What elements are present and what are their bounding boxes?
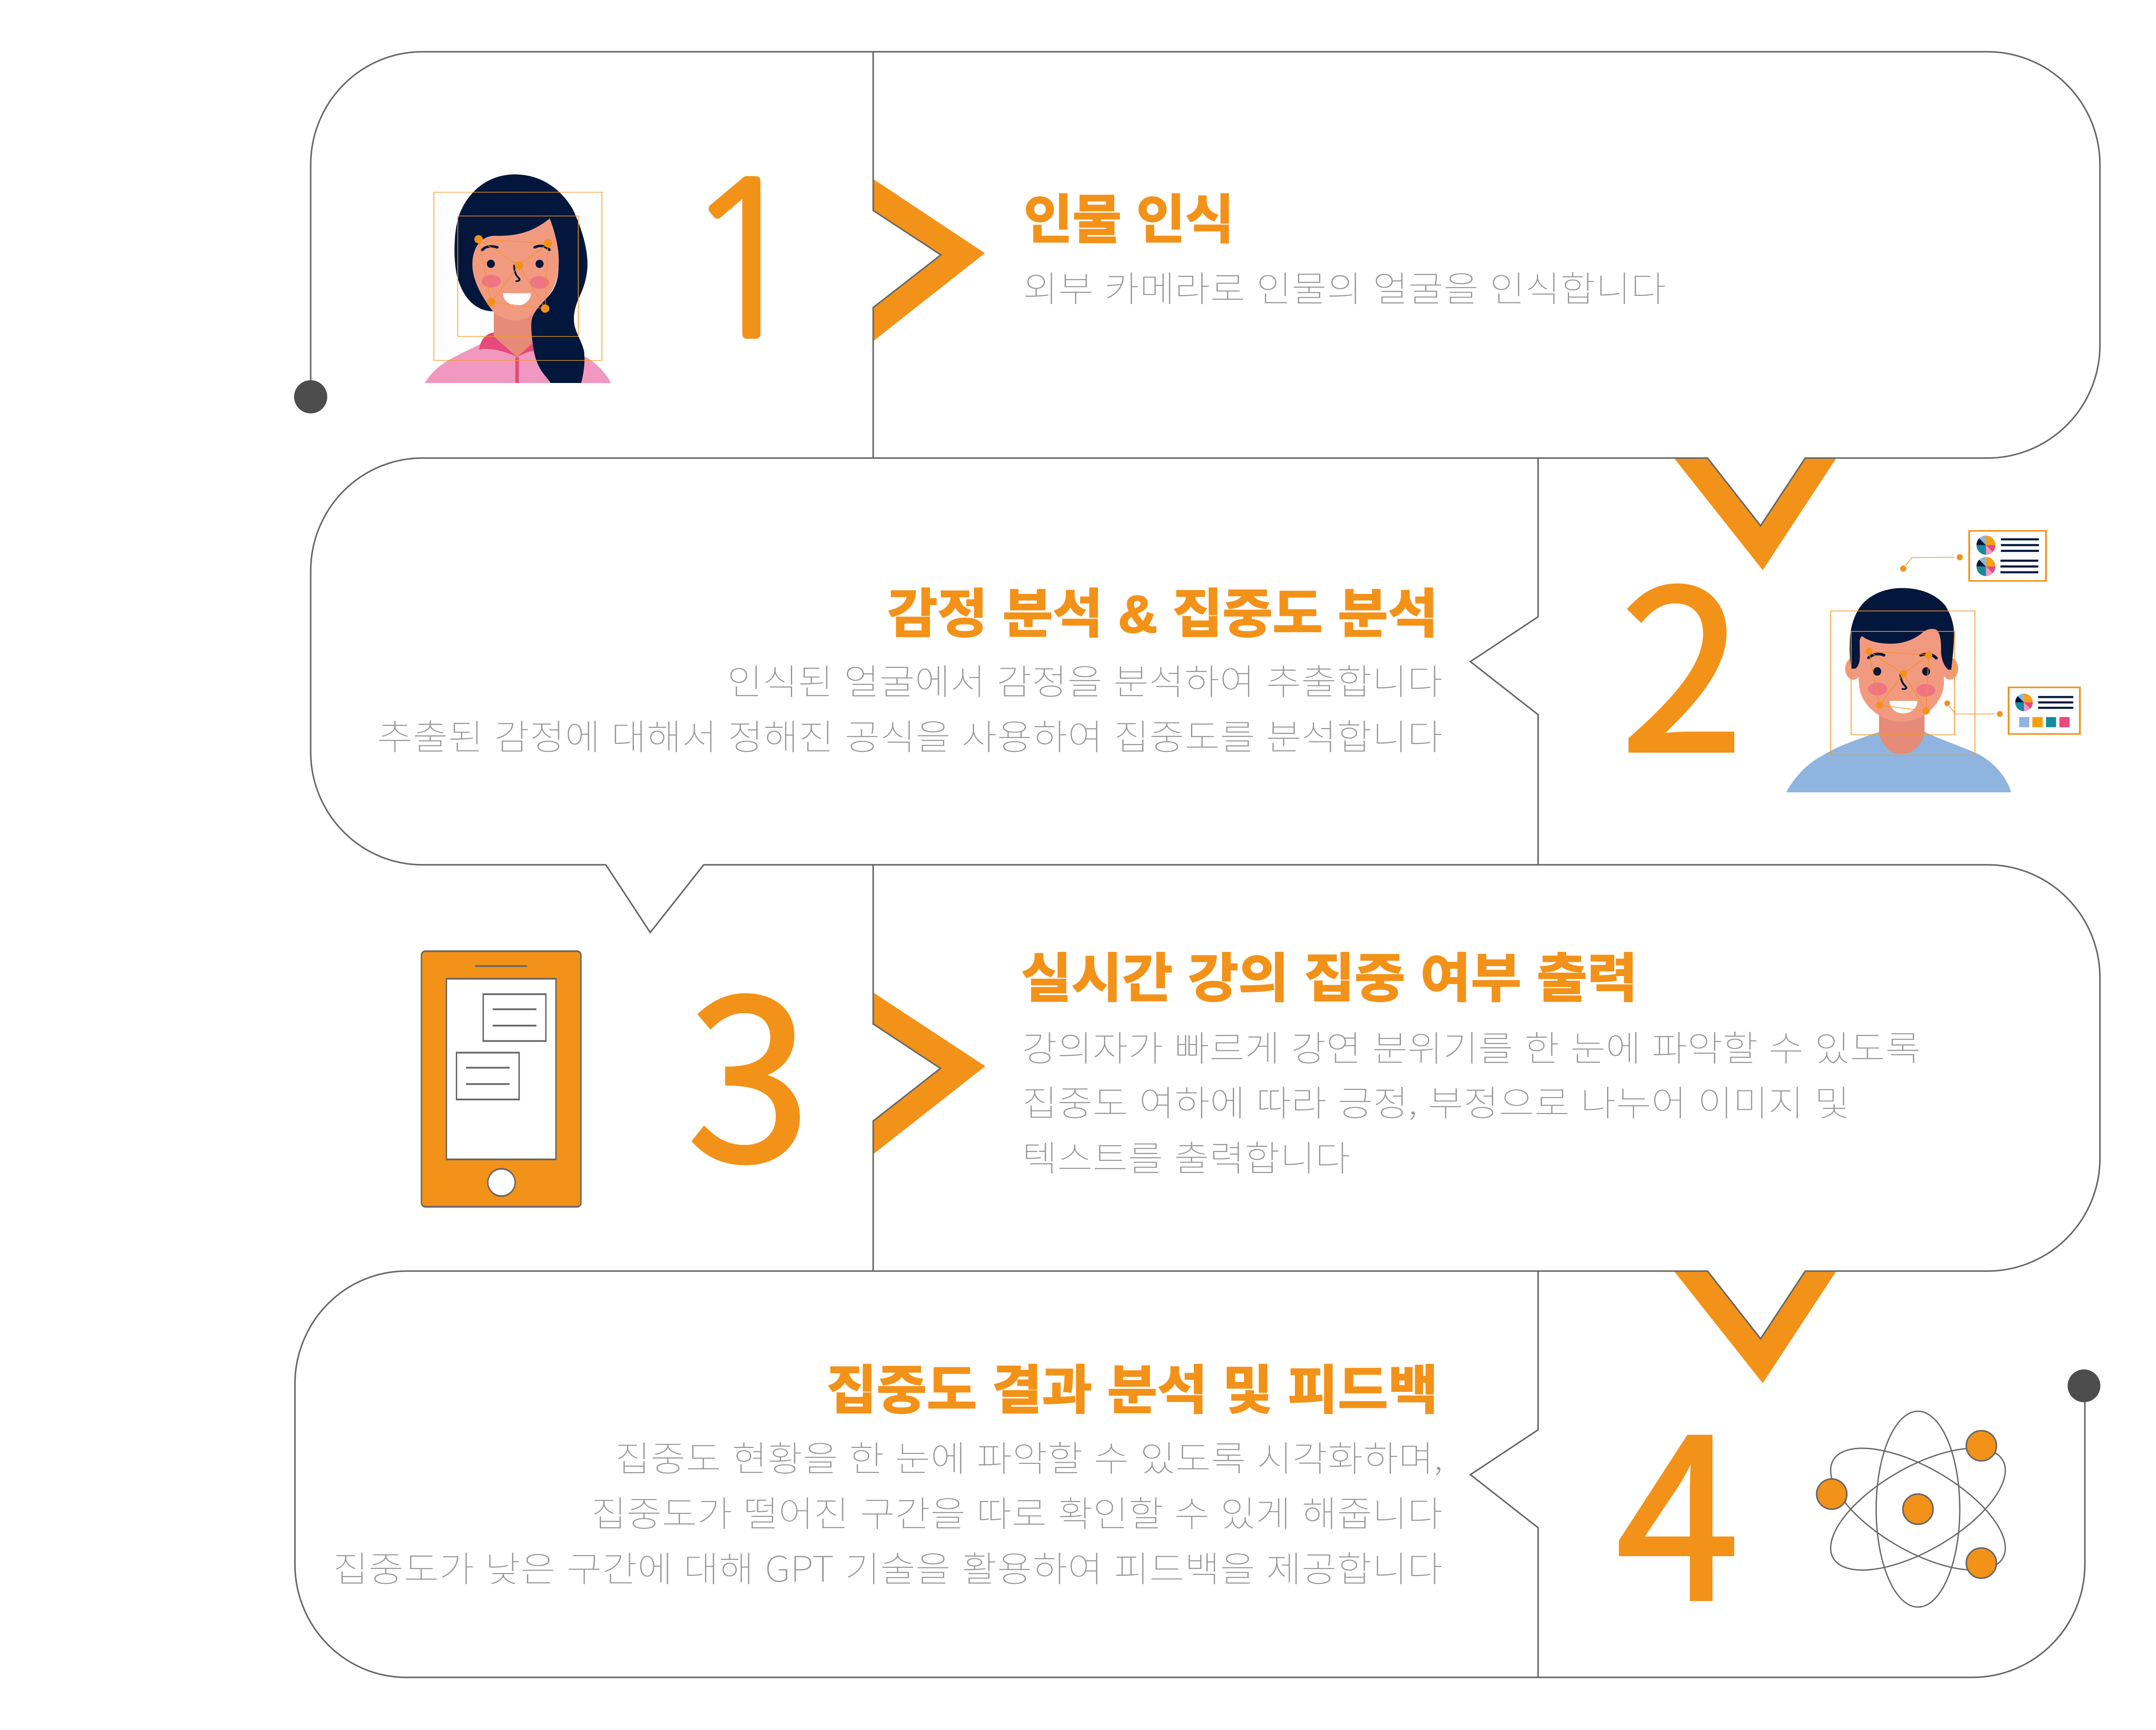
step 1 outline (310, 52, 2100, 526)
step 1 chevron arrow (873, 179, 985, 341)
number 2: 2 (1620, 494, 1744, 815)
step 4 divider (1470, 1271, 1538, 1677)
body text 3: 강의자가 빠르게 강연 분위기를 한 눈에 파악할 수 있도록 (1022, 1020, 1921, 1071)
step 1 panel (294, 52, 2100, 570)
body text 3: 집중도 여하에 따라 긍정, 부정으로 나누어 이미지 및 (1022, 1075, 1850, 1126)
body text 3 (1022, 1020, 1921, 1181)
icon: man face recognition with result cards (1786, 531, 2080, 792)
body text 4: 집중도가 낮은 구간에 대해 GPT 기술을 활용하여 피드백을 제공합니다 (333, 1541, 1443, 1592)
icon: atom (1812, 1411, 2024, 1607)
body text 3: 텍스트를 출력합니다 (1022, 1130, 1351, 1181)
body text 2 (377, 653, 1443, 760)
number 4: 4 (1616, 1342, 1739, 1664)
step 3 outline (406, 865, 2100, 1339)
icon: woman face recognition (425, 174, 611, 383)
body text 1: 외부 카메라로 인물의 얼굴을 인식합니다 (1023, 261, 1666, 312)
step 3 chevron arrow down (1674, 1272, 1836, 1383)
icon: mobile phone with result cards (421, 951, 581, 1207)
heading 1: 인물 인식 (1024, 191, 1234, 249)
body text 4: 집중도 현황을 한 눈에 파악할 수 있도록 시각화하며, (615, 1430, 1443, 1482)
step 2 divider (1470, 458, 1538, 865)
step 4 panel (295, 1271, 2100, 1677)
step 1 chevron arrow down (1674, 458, 1836, 570)
step 1 divider (873, 52, 941, 458)
heading 3: 실시간 강의 집중 여부 출력 (1021, 949, 1638, 1008)
body text 4 (333, 1430, 1443, 1592)
step 3 divider (873, 865, 940, 1271)
step 4 outline (295, 1271, 2085, 1677)
number 1: 1 (680, 154, 809, 367)
body text 2: 추출된 감정에 대해서 정해진 공식을 사용하여 집중도를 분석합니다 (377, 709, 1443, 760)
end dot (2068, 1369, 2100, 1402)
heading 2: 감정 분석 & 집중도 분석 (887, 585, 1438, 644)
step 2 outline (310, 458, 1987, 933)
step 2 panel (310, 458, 2080, 933)
heading 4: 집중도 결과 분석 및 피드백 (827, 1361, 1438, 1420)
start dot (294, 380, 327, 413)
body text 4: 집중도가 떨어진 구간을 따로 확인할 수 있게 해줍니다 (591, 1485, 1443, 1537)
number 3: 3 (687, 904, 811, 1225)
step 3 panel (406, 865, 2100, 1383)
body text 2: 인식된 얼굴에서 감정을 분석하여 추출합니다 (727, 653, 1443, 705)
step 3 chevron arrow (873, 992, 985, 1154)
